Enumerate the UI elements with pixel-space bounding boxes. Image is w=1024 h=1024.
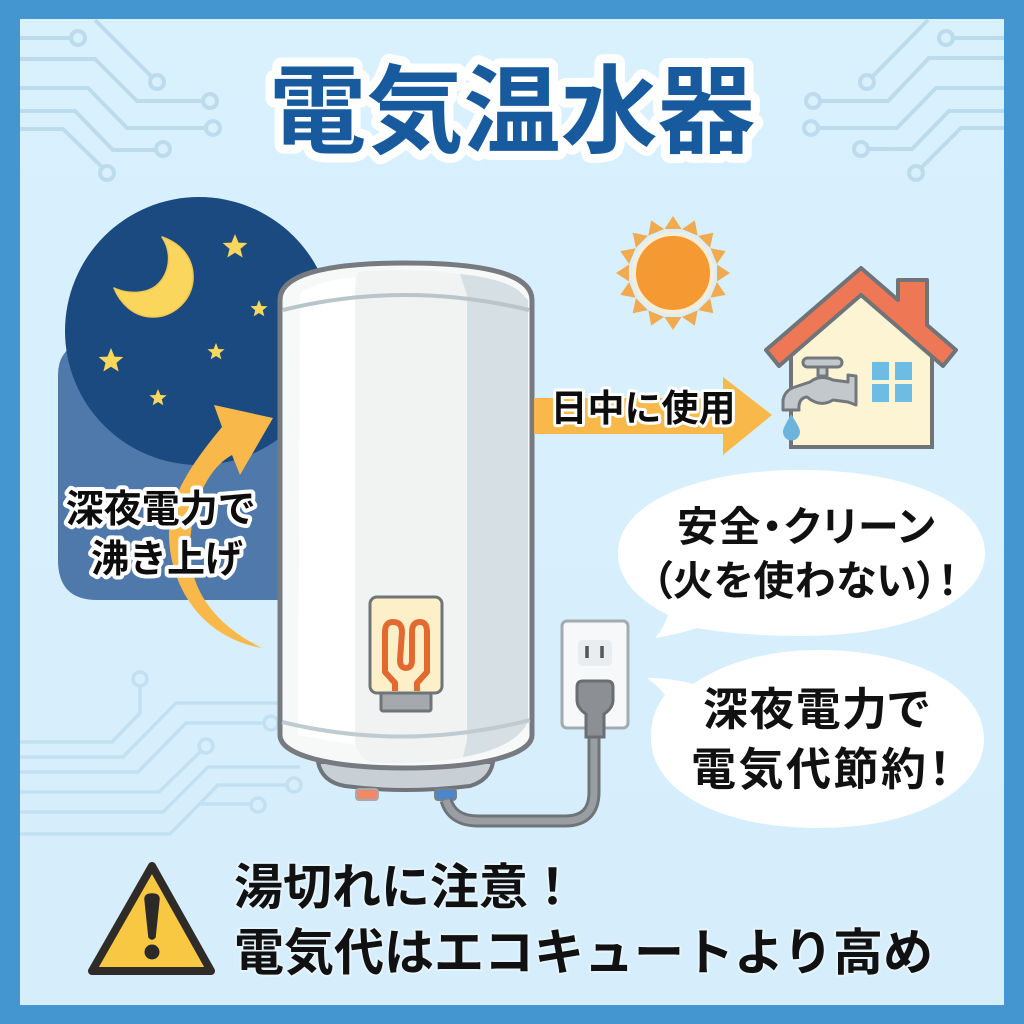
power cord <box>446 735 594 821</box>
plug <box>577 681 613 737</box>
icon: stars <box>99 234 268 405</box>
water heater tank <box>280 263 532 800</box>
night sky circle <box>65 197 333 465</box>
bubble text line 1: 安全・クリーン <box>677 504 935 550</box>
bubble text line 2: 電気代節約！ <box>691 744 951 795</box>
wall outlet and power cord <box>446 621 628 821</box>
heater window <box>370 597 442 693</box>
tank base <box>318 762 493 790</box>
tank white highlight <box>298 277 355 745</box>
label: night power boiling: 深夜電力で <box>66 489 256 531</box>
exclamation dot <box>144 944 160 960</box>
outlet socket <box>578 640 612 666</box>
warning text: 電気代はエコキュートより高め <box>234 925 933 981</box>
sun rays <box>616 216 730 330</box>
window <box>872 362 912 402</box>
tank shading dark <box>460 274 528 757</box>
circuit pattern: top left <box>20 20 220 180</box>
night panel lower block <box>58 343 300 600</box>
bubble text line 2: （火を使わない）！ <box>652 558 958 604</box>
water drop <box>783 414 800 440</box>
circuit pattern: lower left <box>20 672 301 834</box>
icon: house with faucet <box>766 268 956 447</box>
arrow: daytime use <box>534 377 772 455</box>
speech bubble: safe and clean <box>618 470 985 638</box>
bubble shape <box>647 650 984 828</box>
tank shading light <box>355 270 467 763</box>
outlet slots <box>587 646 602 658</box>
bubble text line 1: 深夜電力で <box>703 684 929 735</box>
tank body <box>280 263 532 768</box>
tank top band <box>283 295 529 310</box>
hot water pipe <box>356 789 378 800</box>
icon: warning triangle <box>92 866 211 971</box>
label: night power boiling: 沸き上げ <box>91 539 243 581</box>
label: daytime use: 日中に使用 <box>550 388 736 429</box>
exclamation bar <box>145 894 159 939</box>
triangle <box>92 866 211 971</box>
arrow: night power to tank <box>169 405 273 648</box>
bubble shape <box>618 470 985 638</box>
faucet <box>783 358 856 410</box>
roof with chimney <box>766 268 956 366</box>
tank bottom band <box>282 720 530 737</box>
warning text: 湯切れに注意！ <box>234 861 577 915</box>
outlet plate <box>562 621 628 728</box>
house wall <box>791 285 932 447</box>
icon: crescent moon <box>114 237 193 317</box>
heater flange <box>381 693 431 711</box>
cold water pipe <box>435 789 456 800</box>
circuit pattern: top right <box>804 20 1004 180</box>
night panel <box>58 197 333 600</box>
sun disc <box>634 234 712 312</box>
speech bubble: saving on electricity <box>647 650 984 828</box>
icon: sun <box>616 216 730 330</box>
title: 電気温水器 <box>269 59 755 166</box>
heater coil <box>385 622 427 691</box>
